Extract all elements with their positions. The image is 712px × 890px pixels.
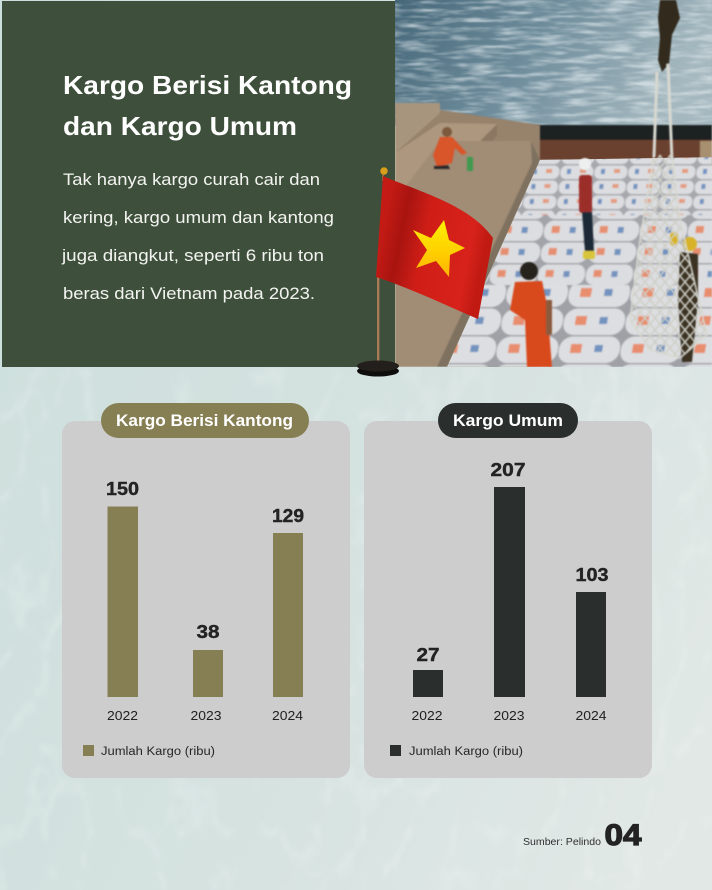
bar 2024: 129: 129	[272, 505, 304, 526]
panel: Kargo Umum chart	[364, 403, 652, 778]
panel: Kargo Berisi Kantong chart	[62, 403, 350, 778]
bar 2024: 103: 2024	[576, 708, 606, 723]
intro paragraph	[61, 170, 334, 303]
intro paragraph: Tak hanya kargo curah cair dan	[63, 170, 320, 189]
heading	[63, 70, 352, 141]
ship rail and hold wall	[533, 124, 712, 166]
legend	[390, 745, 523, 758]
bar 2024: 103: 103	[576, 564, 608, 585]
worker: orange overalls foreground	[510, 262, 552, 367]
bar 2024: 129: 2024	[272, 708, 303, 723]
heading: Kargo Berisi Kantong	[63, 70, 352, 100]
intro paragraph: kering, kargo umum dan kantong	[63, 208, 334, 227]
bar 2023: 207: 2023	[494, 708, 524, 723]
icon: Vietnam table flag	[357, 167, 493, 376]
pill heading	[438, 403, 578, 438]
photo: rice sacks being unloaded from a ship	[395, 0, 712, 367]
bar 2023: 38	[190, 621, 223, 723]
bar 2022: 27	[412, 644, 443, 723]
pill heading	[101, 403, 309, 438]
intro paragraph: juga diangkut, seperti 6 ribu ton	[61, 246, 324, 265]
bar 2023: 207: 207	[490, 459, 526, 480]
heading: dan Kargo Umum	[63, 111, 297, 141]
bar 2023: 207	[490, 459, 526, 723]
bar 2022: 27: 27	[416, 644, 440, 665]
rice sacks	[440, 157, 712, 367]
bar 2023: 38: 2023	[190, 708, 222, 723]
worker: sitting in orange	[433, 127, 473, 171]
bar 2023: 38: 38	[196, 621, 220, 642]
intro paragraph: beras dari Vietnam pada 2023.	[63, 284, 315, 303]
worker: standing in red vest	[579, 158, 595, 259]
concrete steps	[395, 103, 540, 367]
bar 2024: 129	[272, 505, 304, 723]
pill heading: Kargo Berisi Kantong	[116, 412, 293, 430]
page number: 04	[604, 819, 642, 852]
sea	[395, 0, 712, 126]
bar 2022: 150: 2022	[107, 708, 138, 723]
legend: Jumlah Kargo (ribu)	[409, 746, 523, 758]
legend: Jumlah Kargo (ribu)	[101, 746, 215, 758]
bar 2022: 27: 2022	[412, 708, 442, 723]
bar 2022: 150: 150	[106, 478, 139, 499]
bar 2022: 150	[106, 478, 139, 723]
worker: yellow helmet behind net	[670, 232, 698, 362]
pill heading: Kargo Umum	[453, 412, 563, 430]
source credit: Sumber: Pelindo	[523, 837, 601, 848]
bar 2024: 103	[576, 564, 608, 723]
cargo net and hook	[630, 0, 707, 358]
panel: intro text	[2, 1, 395, 367]
